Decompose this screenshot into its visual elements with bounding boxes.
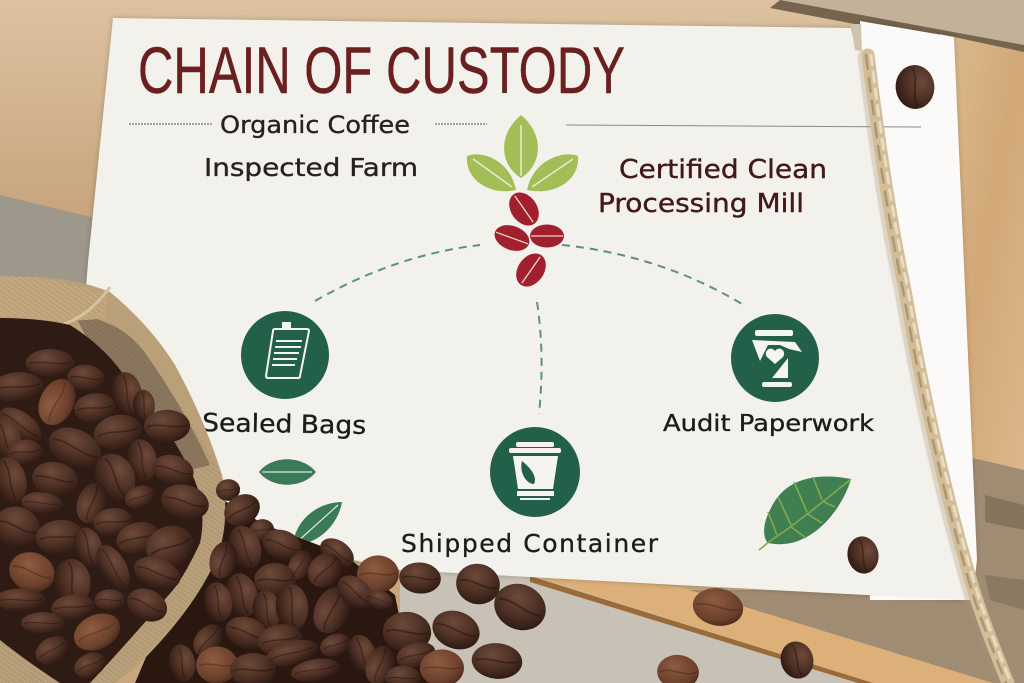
label: audit paperwork: Audit Paperwork xyxy=(663,411,875,437)
loose coffee beans xyxy=(656,63,936,683)
divider lines xyxy=(129,124,921,127)
spilled coffee pile xyxy=(166,477,553,683)
heading: organic coffee inspected farm: Organic Coffee xyxy=(220,111,410,139)
heading: organic coffee inspected farm xyxy=(204,111,418,182)
label: sealed bags: Sealed Bags xyxy=(202,408,366,440)
icon: shipped container xyxy=(490,427,580,517)
dashed connectors xyxy=(315,245,742,414)
heading: certified clean processing mill: Processing Mill xyxy=(598,189,804,219)
title: CHAIN OF CUSTODY xyxy=(138,33,625,107)
heading: certified clean processing mill xyxy=(598,155,827,219)
icon: audit paperwork xyxy=(731,314,819,402)
twine rope xyxy=(865,55,1011,683)
icon: leaves xyxy=(467,115,578,191)
icon: sealed bags xyxy=(241,311,329,399)
icon: small leaf horizontal xyxy=(259,459,316,485)
paper card xyxy=(70,18,977,600)
icon: red coffee beans xyxy=(491,187,564,292)
pile shadow xyxy=(135,495,435,683)
coffee beans in sack xyxy=(0,349,213,683)
heading: certified clean processing mill: Certified Clean xyxy=(619,155,827,185)
burlap sack xyxy=(0,276,226,683)
icon: small leaf diagonal xyxy=(293,502,342,545)
label: shipped container: Shipped Container xyxy=(401,529,659,558)
heading: organic coffee inspected farm: Inspected Farm xyxy=(204,153,418,182)
icon: large green leaf xyxy=(759,477,851,550)
